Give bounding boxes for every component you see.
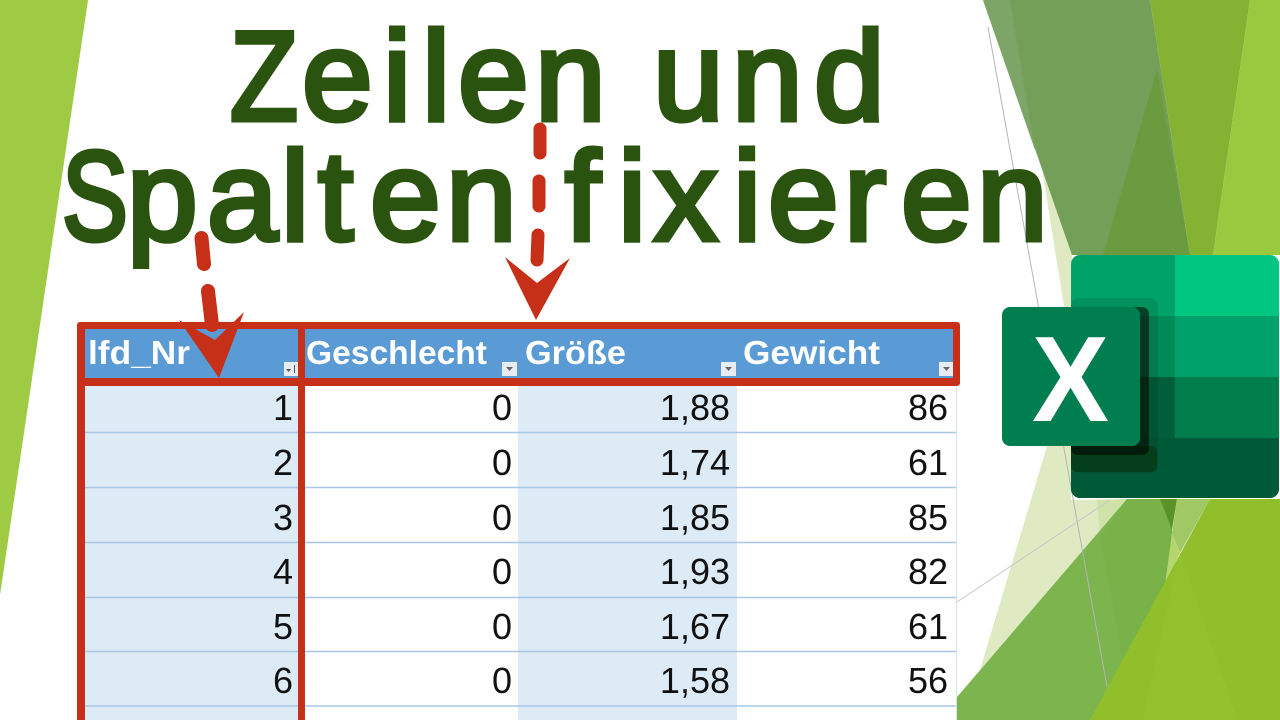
data rows: 82: [908, 551, 948, 592]
data rows: 85: [908, 497, 948, 538]
arrow: down to first column: [179, 238, 244, 378]
data table: [77, 322, 960, 720]
data rows: 56: [908, 660, 948, 701]
data rows: 86: [908, 387, 948, 428]
data rows: 1,88: [660, 387, 730, 428]
data rows: 61: [908, 442, 948, 483]
data rows: [273, 387, 948, 701]
data rows: 5: [273, 606, 293, 647]
right decorative green facets: [957, 0, 1280, 720]
data rows: 2: [273, 442, 293, 483]
data rows: 0: [492, 551, 512, 592]
header row: lfd_Nr: [88, 334, 190, 371]
title: palten fixieren: [127, 125, 1048, 267]
data rows: 1,74: [660, 442, 730, 483]
title: [62, 5, 1048, 267]
data rows: 0: [492, 497, 512, 538]
header row: Größe: [525, 334, 626, 371]
filter buttons: [284, 362, 953, 376]
data rows: 1,58: [660, 660, 730, 701]
arrow: down to header row: [505, 129, 570, 320]
data rows: 1,85: [660, 497, 730, 538]
data rows: 3: [273, 497, 293, 538]
red freeze frames: [77, 322, 960, 720]
data rows: 4: [273, 551, 293, 592]
icon: Excel logo: [1002, 255, 1280, 498]
letter X: X: [1032, 311, 1109, 447]
data rows: 0: [492, 660, 512, 701]
header row: [85, 329, 953, 379]
title: eilen und: [302, 5, 885, 147]
header row: Geschlecht: [306, 334, 487, 371]
data rows: 1: [273, 387, 293, 428]
data rows: 1,67: [660, 606, 730, 647]
data rows: 61: [908, 606, 948, 647]
column fills: [85, 378, 957, 720]
data rows: 0: [492, 442, 512, 483]
data rows: 0: [492, 606, 512, 647]
data rows: 1,93: [660, 551, 730, 592]
data rows: 6: [273, 660, 293, 701]
left green wedge: [0, 0, 88, 595]
title: Z: [230, 5, 298, 147]
title: S: [62, 125, 128, 267]
data rows: 0: [492, 387, 512, 428]
header row: Gewicht: [743, 334, 880, 371]
row lines: [85, 432, 956, 706]
